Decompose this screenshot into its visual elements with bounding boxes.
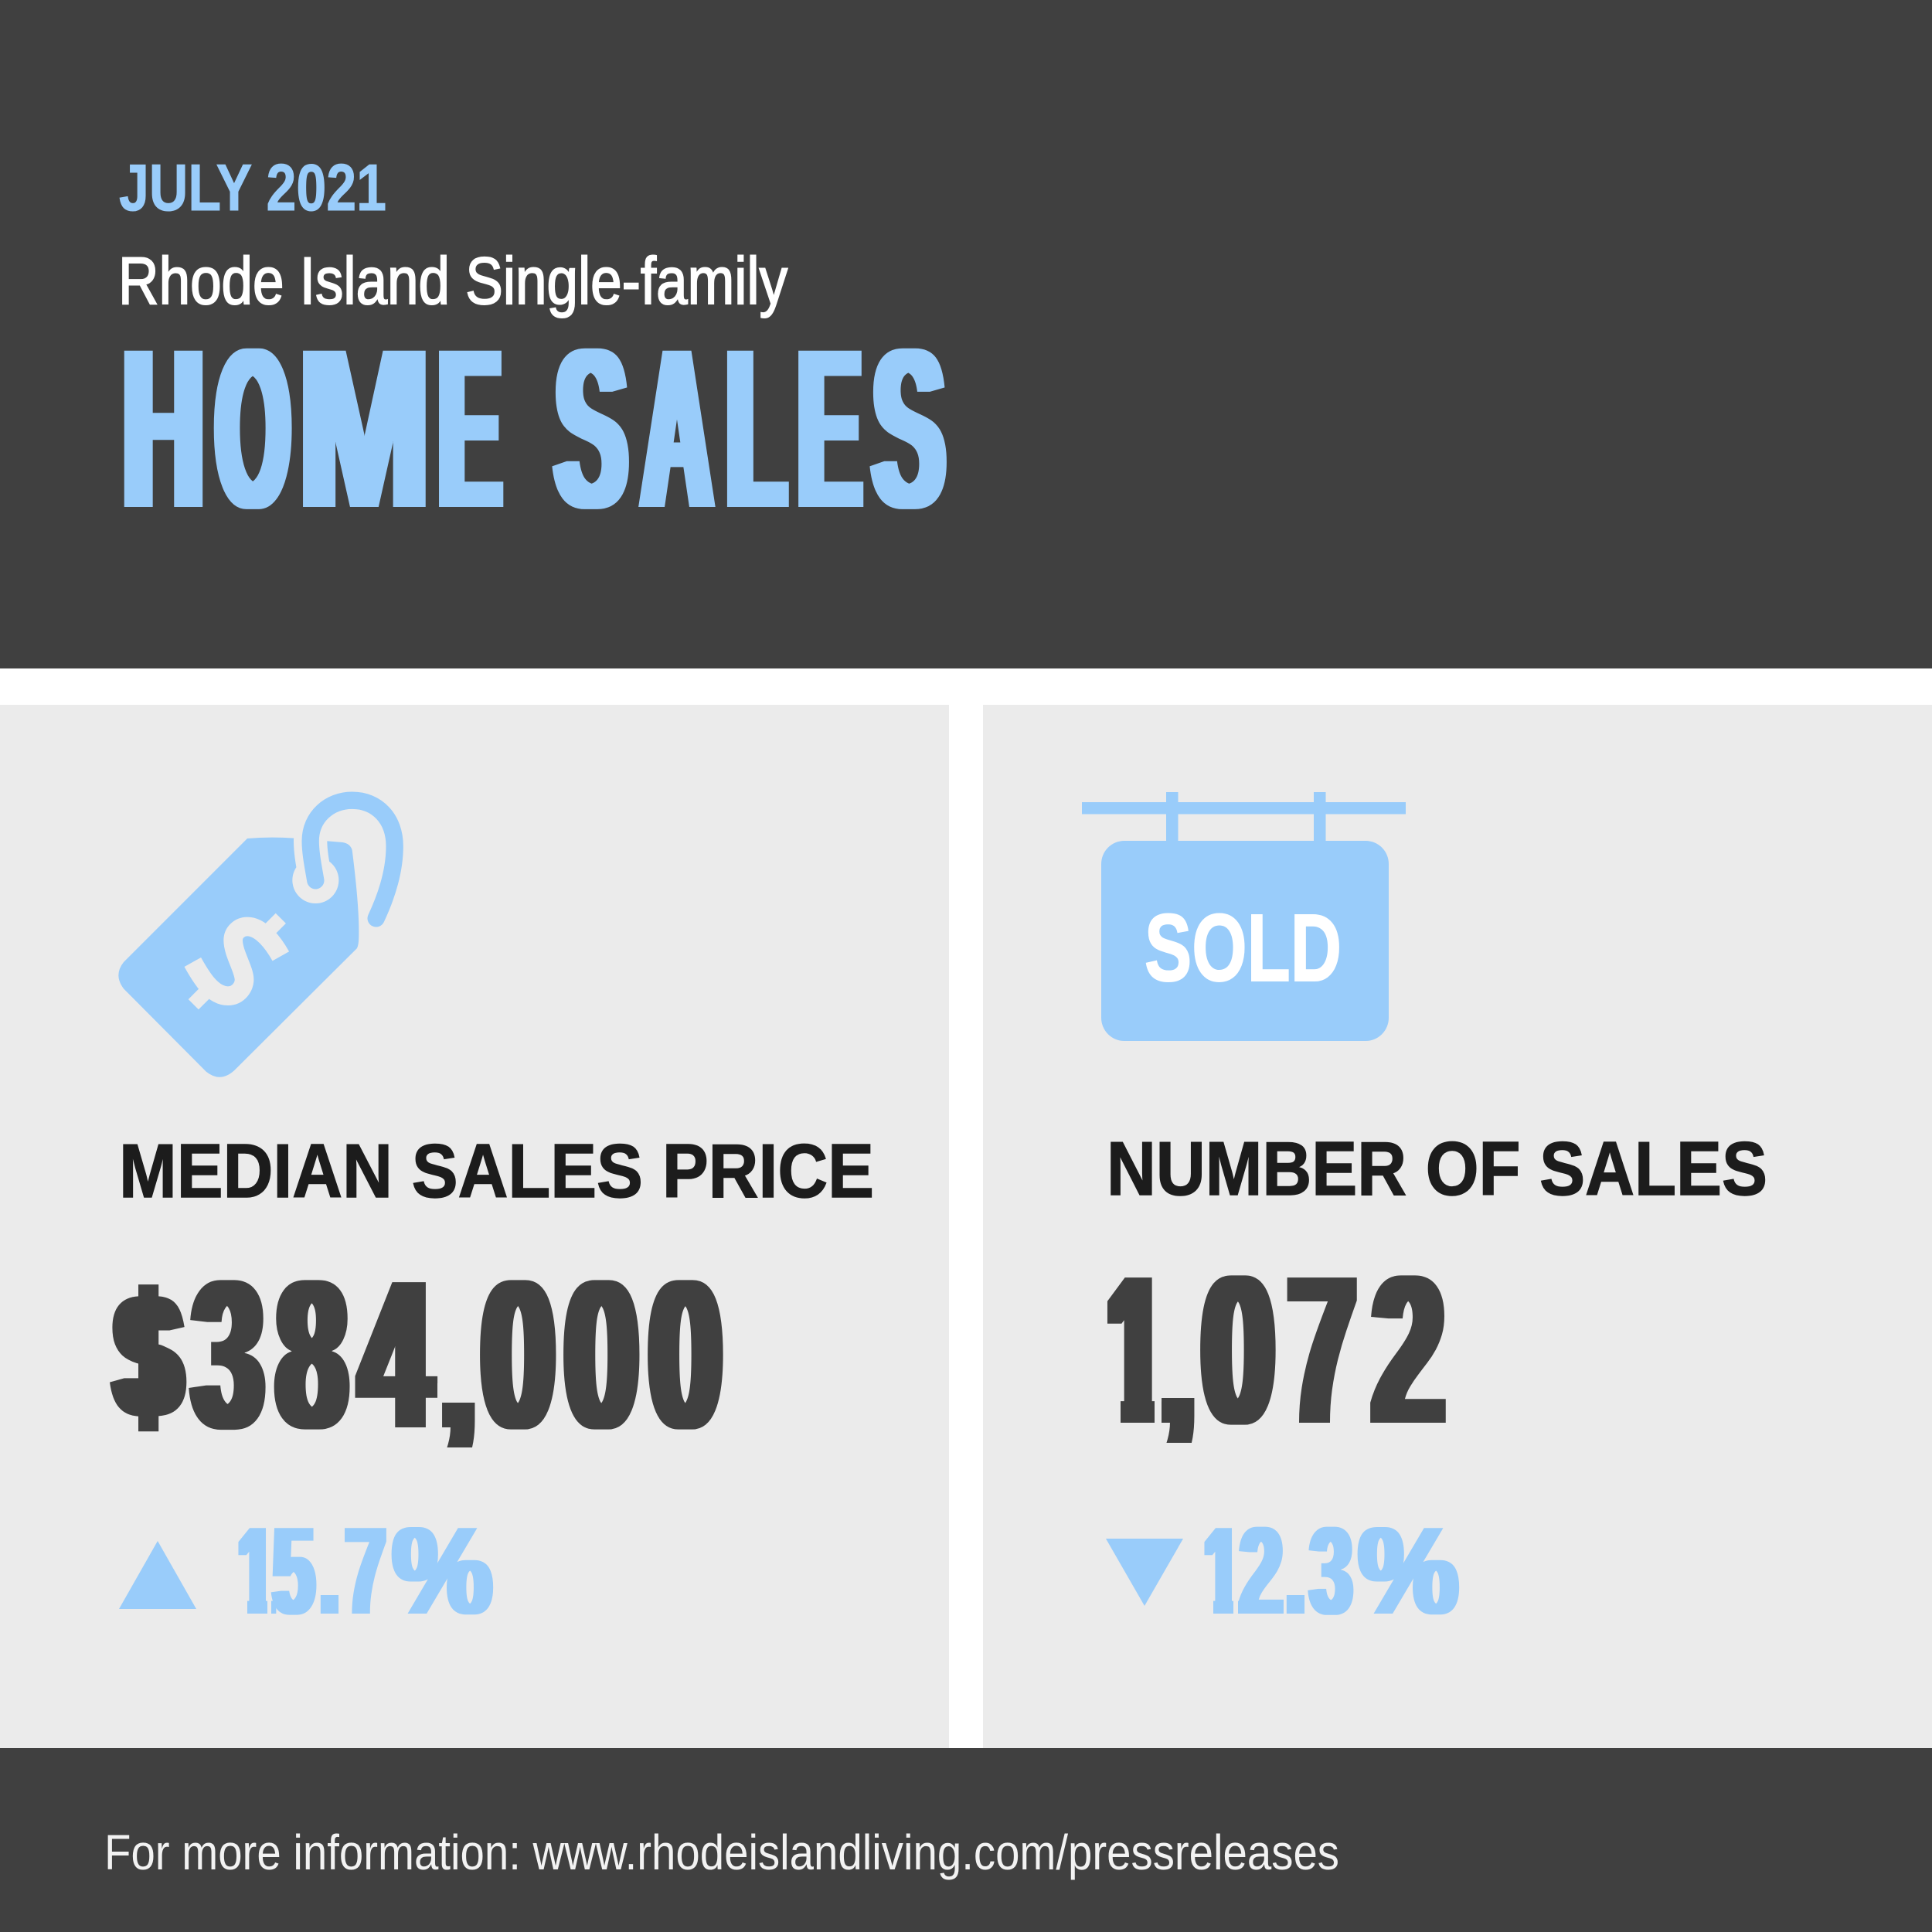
title: H bbox=[123, 302, 204, 556]
change: median sales price: 5 bbox=[273, 1502, 315, 1641]
title: E bbox=[798, 302, 861, 556]
title: S bbox=[555, 302, 627, 556]
value: median sales price: 0 bbox=[565, 1236, 638, 1472]
title: E bbox=[439, 302, 501, 556]
header panel bbox=[0, 0, 1932, 668]
footer text: For more information: www.rhodeislandliving.com/pressreleases bbox=[104, 1825, 1339, 1880]
header panel: S bbox=[872, 302, 944, 556]
value: median sales price: 4 bbox=[360, 1236, 432, 1472]
value: number of sales: 0 bbox=[1202, 1232, 1274, 1468]
value: median sales price: 8 bbox=[277, 1236, 346, 1472]
value: number of sales: 7 bbox=[1289, 1232, 1355, 1468]
change: median sales price: . bbox=[320, 1502, 340, 1641]
date label: JULY 2021 bbox=[119, 151, 386, 225]
value: median sales price: $ bbox=[115, 1256, 181, 1457]
title: A bbox=[642, 302, 712, 556]
change: median sales price: 1 bbox=[238, 1502, 274, 1641]
value: median sales price: 3 bbox=[193, 1236, 263, 1472]
change: number of sales: 2 bbox=[1240, 1502, 1283, 1641]
heading: number of sales: NUMBER OF SALES bbox=[1107, 1126, 1767, 1211]
change: number of sales: % bbox=[1359, 1502, 1458, 1641]
change: number of sales: . bbox=[1286, 1502, 1306, 1641]
change: median sales price: % bbox=[393, 1502, 492, 1641]
change: number of sales: 3 bbox=[1310, 1502, 1352, 1641]
value: median sales price: , bbox=[440, 1236, 477, 1472]
subtitle: Rhode Island Single-family bbox=[118, 244, 787, 318]
icon: sold sign bbox=[1082, 792, 1406, 1041]
title: M bbox=[298, 302, 430, 556]
icon: sold sign: SOLD bbox=[1145, 896, 1342, 1002]
footer panel bbox=[0, 1748, 1932, 1932]
value: number of sales: 2 bbox=[1372, 1232, 1444, 1468]
value: number of sales: 1 bbox=[1107, 1232, 1164, 1468]
change: median sales price: 7 bbox=[345, 1502, 386, 1641]
value: median sales price: 0 bbox=[481, 1236, 554, 1472]
value: number of sales: , bbox=[1159, 1232, 1196, 1468]
icon: price tag bbox=[118, 801, 395, 1077]
title: O bbox=[216, 302, 290, 556]
icon: down arrow bbox=[1106, 1539, 1183, 1606]
icon: up arrow bbox=[119, 1541, 196, 1609]
panel: median sales price bbox=[0, 705, 949, 1748]
value: median sales price: 0 bbox=[649, 1236, 722, 1472]
heading: median sales price: MEDIAN SALES PRICE bbox=[119, 1128, 874, 1213]
change: number of sales: 1 bbox=[1204, 1502, 1240, 1641]
panel: number of sales bbox=[983, 705, 1932, 1748]
title: L bbox=[727, 302, 786, 556]
